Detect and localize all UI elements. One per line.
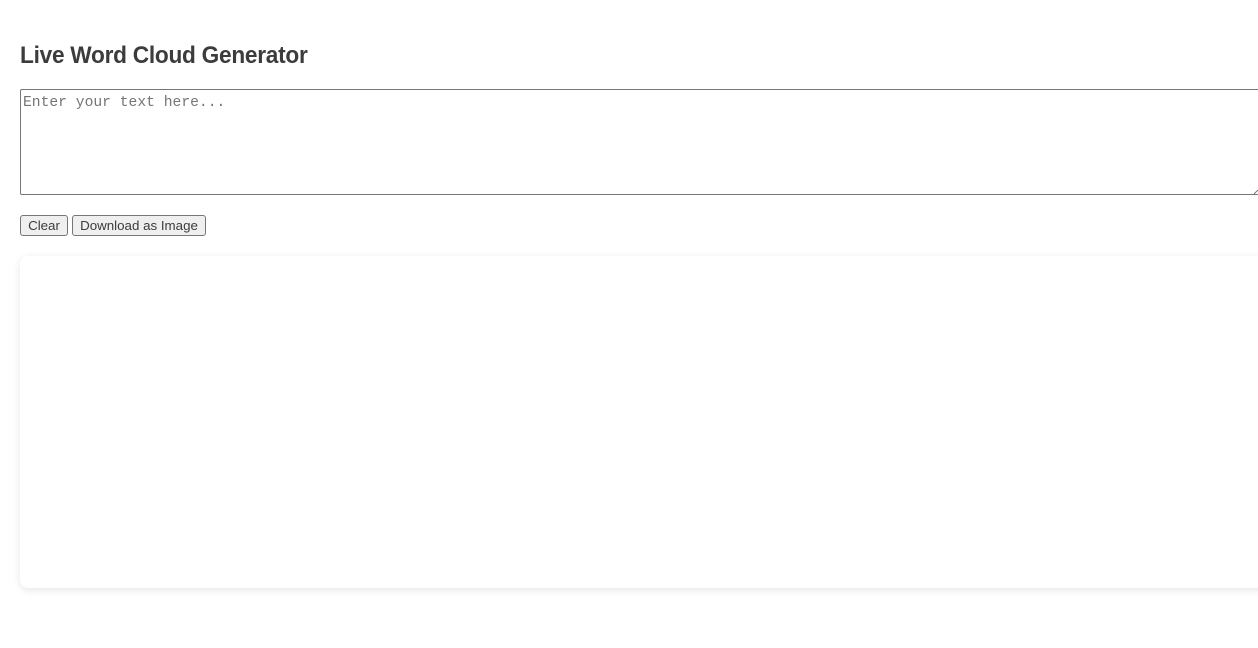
placeholder text: Enter your text here... — [23, 95, 225, 111]
text input box — [20, 89, 1258, 195]
button: download as image — [72, 215, 206, 236]
panel: word cloud output — [20, 256, 1258, 588]
button: clear — [20, 215, 68, 236]
title: Live Word Cloud Generator — [20, 42, 308, 69]
button: download as image: Download as Image — [80, 218, 198, 233]
button: clear: Clear — [28, 218, 60, 233]
icon: textarea resize handle — [1254, 190, 1258, 194]
